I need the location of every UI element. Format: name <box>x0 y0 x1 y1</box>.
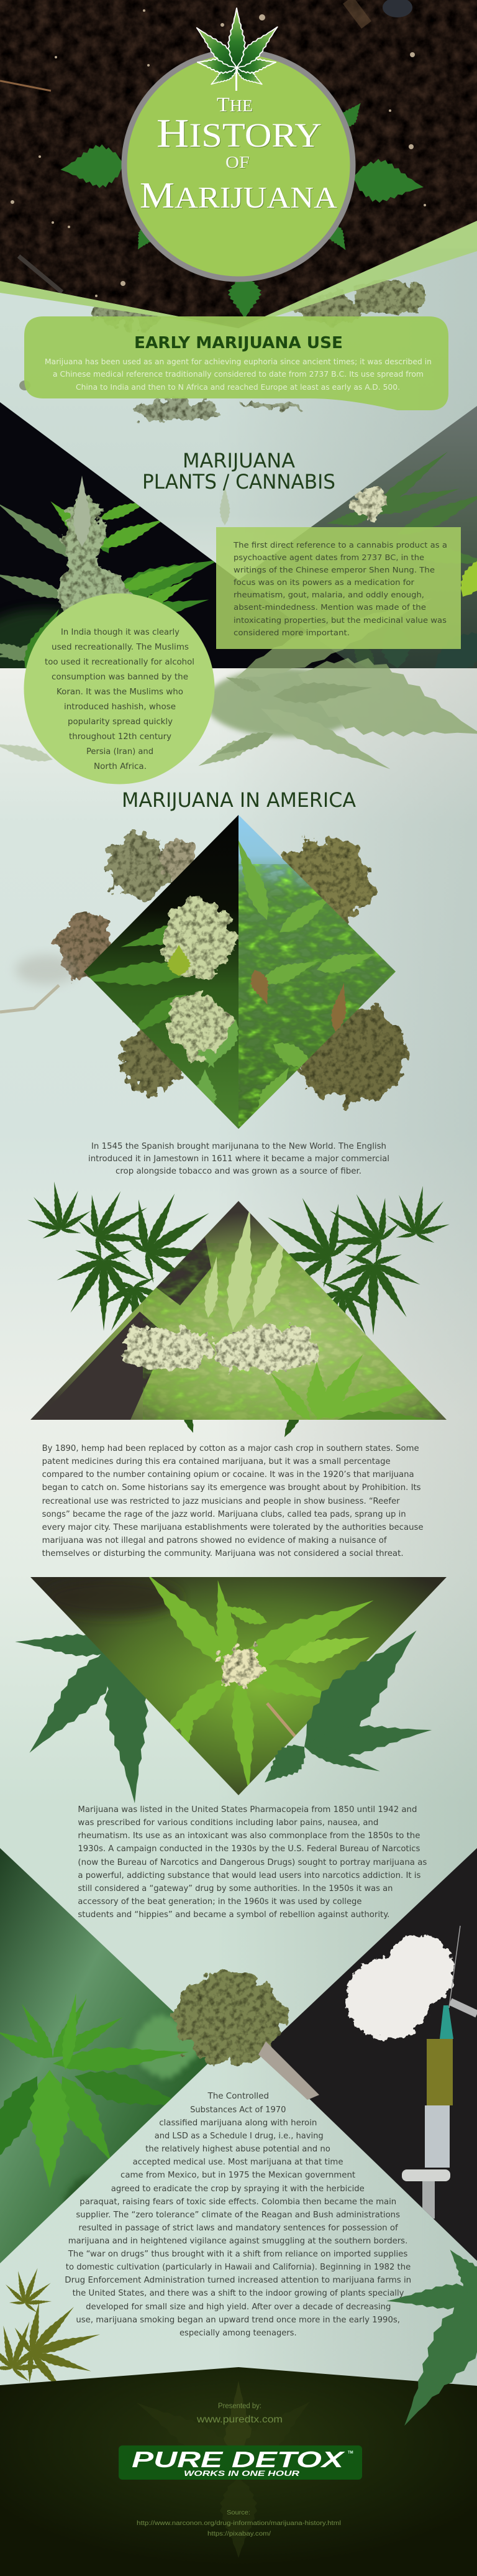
panel: india circle: In India though it was clearly <box>61 628 179 637</box>
panel: india circle <box>24 593 215 784</box>
text: controlled substances act: accepted medical use. Most marijuana at that time <box>133 2158 343 2167</box>
text: sources: Source: <box>227 2509 250 2516</box>
text: hemp replaced by cotton: themselves or disturbing the community. Marijuana was not considered a social threat. <box>42 1549 404 1558</box>
image: flowering plant on black <box>0 398 360 684</box>
text: hemp replaced by cotton <box>42 1444 424 1558</box>
title <box>140 94 338 216</box>
icon: hemp plants left <box>21 1170 236 1435</box>
panel: india circle: Koran. It was the Muslims who <box>57 688 183 697</box>
image: dried buds behind early use panel <box>19 282 429 421</box>
text: controlled substances act: resulted in passage of strict laws and mandatory sentences for possession of <box>78 2224 398 2233</box>
image: flowering plant on grey background <box>236 404 477 684</box>
icon: powder pile <box>346 1934 453 2040</box>
text: early use paragraph: a Chinese medical reference traditionally considered to date from 2737 B.C. Its use spread from <box>53 370 424 379</box>
text: united states pharmacopeia <box>78 1805 427 1920</box>
text: hemp replaced by cotton: songs” became the rage of the jazz world. Marijuana clubs, called tea pads, sprang up in <box>42 1510 406 1519</box>
heading: marijuana plants / cannabis <box>142 449 335 494</box>
text: spanish brought marijuana <box>88 1142 389 1176</box>
panel: early marijuana use <box>24 316 448 410</box>
text: controlled substances act: agreed to eradicate the crop by spraying it with the herbicide <box>111 2184 365 2194</box>
image: diamond photo left half <box>84 815 238 1129</box>
text: controlled substances act: supplier. The “zero tolerance” climate of the Reagan and Bush administrations <box>76 2210 400 2220</box>
text: controlled substances act: marijuana and in heightened vigilance against smuggling at the southern borders. <box>68 2237 407 2246</box>
logo: pure detox <box>119 2445 362 2480</box>
text: early use paragraph <box>45 357 432 392</box>
text: united states pharmacopeia: 1930s. A campaign conducted in the 1930s by the U.S. Federal Bureau of Narcotics <box>78 1844 420 1854</box>
text: united states pharmacopeia: was prescribed for various conditions including labor pains, nausea, and <box>78 1818 378 1828</box>
image: dark table with powder and syringe <box>258 1846 477 2263</box>
icon: leaf silhouette right <box>255 1612 435 1793</box>
panel: first direct reference box: focus was on its powers as a medication for <box>234 578 415 587</box>
text: spanish brought marijuana: crop alongside tobacco and was grown as a source of fiber. <box>116 1167 361 1176</box>
text: spanish brought marijuana: In 1545 the Spanish brought marijunana to the New World. The English <box>91 1142 386 1151</box>
image: upward triangle photo <box>28 1200 450 1430</box>
image: diamond photo right half <box>228 814 397 1131</box>
green chevron band <box>0 221 477 328</box>
text: hemp replaced by cotton: recreational use was restricted to jazz musicians and people in show business. “Reefer <box>42 1497 400 1506</box>
text: united states pharmacopeia: students and “hippies” and became a symbol of rebellion against authority. <box>78 1910 389 1920</box>
heading: early marijuana use: EARLY MARIJUANA USE <box>134 334 343 352</box>
text: sources: https://pixabay.com/ <box>207 2530 271 2537</box>
panel: india circle: consumption was banned by the <box>52 673 188 682</box>
text: controlled substances act: Drug Enforcement Administration turned increased attention to marijuana farms in <box>65 2276 411 2285</box>
text: united states pharmacopeia: (now the Bureau of Narcotics and Dangerous Drugs) sought to portray marijuana as <box>78 1858 427 1867</box>
panel: india circle: introduced hashish, whose <box>64 702 176 712</box>
text: website: www.puredtx.com <box>196 2414 283 2425</box>
heading: marijuana plants / cannabis: MARIJUANA <box>183 449 295 472</box>
text: united states pharmacopeia: still considered a “gateway” drug by some authorities. In the 1950s it was an <box>78 1884 393 1893</box>
text: controlled substances act: developed for small size and high yield. After over a decade of decreasing <box>86 2302 391 2312</box>
panel: india circle: popularity spread quickly <box>68 717 173 727</box>
text: controlled substances act: the United States, and there was a shift to the indoor growing of plants specially <box>73 2289 404 2298</box>
icon: leaves around badge <box>58 98 427 319</box>
icon: syringe <box>402 1926 460 2219</box>
panel: first direct reference box: intoxicating properties, but the medicinal value was <box>234 616 447 625</box>
text: hemp replaced by cotton: patent medicines during this era contained marijuana, but it was a small percentage <box>42 1457 391 1466</box>
text: controlled substances act: the relatively highest abuse potential and no <box>145 2145 330 2154</box>
panel: india circle: too used it recreationally for alcohol <box>45 658 194 667</box>
text: hemp replaced by cotton: every major city. These marijuana establishments were tolerated by the authorities because <box>42 1523 424 1532</box>
text: united states pharmacopeia: Marijuana was listed in the United States Pharmacopeia from 1850 until 1942 and <box>78 1805 417 1815</box>
text: controlled substances act: paraquat, raising fears of toxic side effects. Colombia then became the main <box>80 2197 396 2207</box>
title badge <box>58 8 427 319</box>
image: faded leaf plant <box>0 485 477 780</box>
text: hemp replaced by cotton: By 1890, hemp had been replaced by cotton as a major cash crop in southern states. Some <box>42 1444 419 1453</box>
image: dried bud with metal clip <box>175 1970 319 2100</box>
panel: india circle: throughout 12th century <box>69 732 171 742</box>
title: MARIJUANA <box>140 175 338 216</box>
text: united states pharmacopeia: rheumatism. Its use as an intoxicant was also commonplace from the 1850s to the <box>78 1831 420 1841</box>
text: united states pharmacopeia: accessory of the beat generation; in the 1960s it was used by college <box>78 1897 361 1907</box>
heading: marijuana plants / cannabis: PLANTS / CANNABIS <box>142 470 335 494</box>
panel: india circle: North Africa. <box>94 762 147 771</box>
hero soil photo background <box>0 0 477 329</box>
icon: leaf silhouette left <box>14 1631 157 1805</box>
title: HISTORY <box>157 111 322 156</box>
heading: marijuana in america: MARIJUANA IN AMERICA <box>122 788 356 812</box>
text: controlled substances act: classified marijuana along with heroin <box>159 2118 317 2128</box>
text: hemp replaced by cotton: compared to the number containing opium or cocaine. It was in the 1920’s that marijuana <box>42 1470 414 1479</box>
icon: olive plant bottom left <box>0 2260 112 2403</box>
text: controlled substances act: and LSD as a Schedule I drug, i.e., having <box>155 2132 324 2141</box>
text: hemp replaced by cotton: began to catch on. Some historians say its emergence was brought about by Prohibition. Its <box>42 1483 421 1493</box>
image: downward triangle photo <box>28 1564 450 1797</box>
panel: first direct reference box: psychoactive agent dates from 2737 BC, in the <box>234 553 424 563</box>
image: dried buds behind diamond <box>0 836 406 1102</box>
text: controlled substances act <box>65 2092 411 2338</box>
logo: pure detox: PURE DETOX <box>132 2447 345 2472</box>
panel: india circle: used recreationally. The Muslims <box>52 643 189 652</box>
panel: india circle: Persia (Iran) and <box>86 747 153 757</box>
title: THE <box>217 94 253 116</box>
text: united states pharmacopeia: a powerful, addicting substance that would lead users into narcotics addiction. It is <box>78 1871 420 1880</box>
text: controlled substances act: Substances Act of 1970 <box>190 2105 286 2115</box>
text: sources <box>137 2509 341 2537</box>
icon: leaf silhouette bottom right <box>384 2242 477 2439</box>
text: controlled substances act: The Controlled <box>207 2092 269 2101</box>
logo: pure detox: TM <box>348 2451 353 2455</box>
title: OF <box>225 153 250 172</box>
text: spanish brought marijuana: introduced it in Jamestown in 1611 where it became a major commercial <box>88 1154 389 1164</box>
text: controlled substances act: The “war on drugs” thus brought with it a shift from reliance on imported supplies <box>68 2250 407 2259</box>
text: presented by: Presented by: <box>218 2403 261 2410</box>
badge circle <box>124 52 353 279</box>
panel: first direct reference box: writings of the Chinese emperor Shen Nung. The <box>234 566 435 575</box>
text: hemp replaced by cotton: marijuana was not illegal and patrons showed no evidence of making a nuisance of <box>42 1536 387 1545</box>
text: controlled substances act: use, marijuana smoking began an upward trend once more in the early 1990s, <box>76 2316 400 2325</box>
panel: first direct reference box: considered more important. <box>234 628 350 638</box>
panel: first direct reference box <box>216 527 461 649</box>
text: controlled substances act: came from Mexico, but in 1975 the Mexican government <box>120 2171 355 2180</box>
text: controlled substances act: especially among teenagers. <box>179 2329 297 2338</box>
text: early use paragraph: Marijuana has been used as an agent for achieving euphoria since ancient times; it was described in <box>45 357 432 366</box>
text: early use paragraph: China to India and then to N Africa and reached Europe at least as early as A.D. 500. <box>76 383 400 392</box>
icon: hemp plants right <box>241 1174 456 1440</box>
panel: first direct reference box: rheumatism, gout, malaria, and oddly enough, <box>234 591 424 600</box>
panel: first direct reference box: The first direct reference to a cannabis product as a <box>233 541 447 550</box>
image: faint bud in footer <box>129 2381 319 2558</box>
panel: first direct reference box: absent-mindedness. Mention was made of the <box>234 603 426 612</box>
text: sources: http://www.narconon.org/drug-information/marijuana-history.html <box>137 2519 341 2527</box>
image: green plant closeup <box>0 1846 221 2266</box>
icon: spoon <box>450 2002 477 2014</box>
panel: footer <box>0 2367 477 2576</box>
text: controlled substances act: to domestic cultivation (particularly in Hawaii and California). Beginning in 1982 the <box>66 2263 411 2272</box>
icon: marijuana leaf logo <box>191 8 283 91</box>
logo: pure detox: WORKS IN ONE HOUR <box>184 2470 300 2478</box>
